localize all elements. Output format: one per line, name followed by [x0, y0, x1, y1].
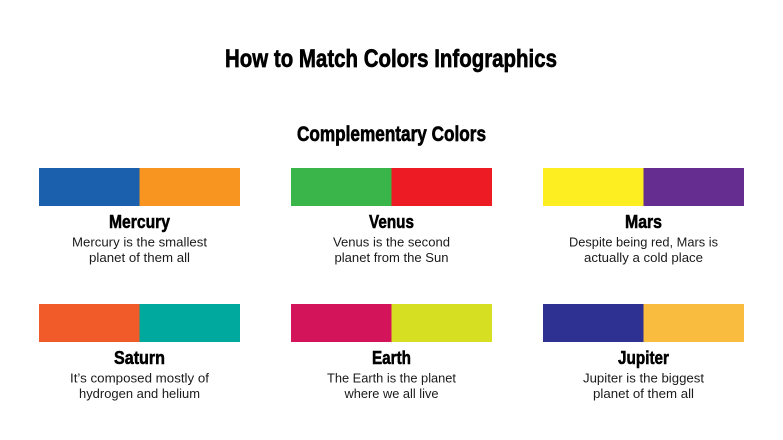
title: How to Match Colors Infographics	[225, 45, 557, 73]
name: Mars: Mars	[625, 211, 662, 232]
description: Mercury	[72, 234, 207, 265]
description: Mercury: Mercury is the smallest	[72, 234, 207, 250]
color swatch: green and red	[291, 168, 492, 206]
name: Mercury: Mercury	[109, 211, 171, 232]
description: Venus: planet from the Sun	[334, 250, 448, 265]
description: Earth: The Earth is the planet	[327, 370, 456, 386]
description: Jupiter: Jupiter is the biggest	[583, 370, 704, 386]
description: Earth: where we all live	[344, 386, 438, 401]
color swatch: yellow and purple	[543, 168, 744, 206]
panel: Saturn	[39, 304, 240, 401]
color swatch: indigo and amber	[543, 304, 744, 342]
panel: Earth	[291, 304, 492, 401]
description: Earth	[327, 370, 456, 401]
color swatch: magenta and lime	[291, 304, 492, 342]
description: Mars: actually a cold place	[584, 250, 703, 265]
description: Mercury: planet of them all	[89, 250, 190, 265]
name: Jupiter: Jupiter	[618, 347, 669, 368]
description: Mars	[569, 234, 718, 265]
description: Saturn: It’s composed mostly of	[70, 370, 209, 386]
panel: Venus	[291, 168, 492, 265]
color swatch: orange-red and teal	[39, 304, 240, 342]
description: Saturn	[70, 370, 209, 401]
panel: Jupiter	[543, 304, 744, 401]
panel: Mars	[543, 168, 744, 265]
name: Earth: Earth	[372, 347, 411, 368]
name: Venus: Venus	[369, 211, 414, 232]
description: Saturn: hydrogen and helium	[79, 386, 200, 401]
description: Jupiter	[583, 370, 704, 401]
panel: Mercury	[39, 168, 240, 265]
description: Venus: Venus is the second	[333, 234, 450, 250]
description: Mars: Despite being red, Mars is	[569, 234, 718, 250]
name: Saturn: Saturn	[114, 347, 165, 368]
color swatch: blue and orange	[39, 168, 240, 206]
description: Venus	[333, 234, 450, 265]
section heading: Complementary Colors	[297, 123, 486, 146]
description: Jupiter: planet of them all	[593, 386, 694, 401]
